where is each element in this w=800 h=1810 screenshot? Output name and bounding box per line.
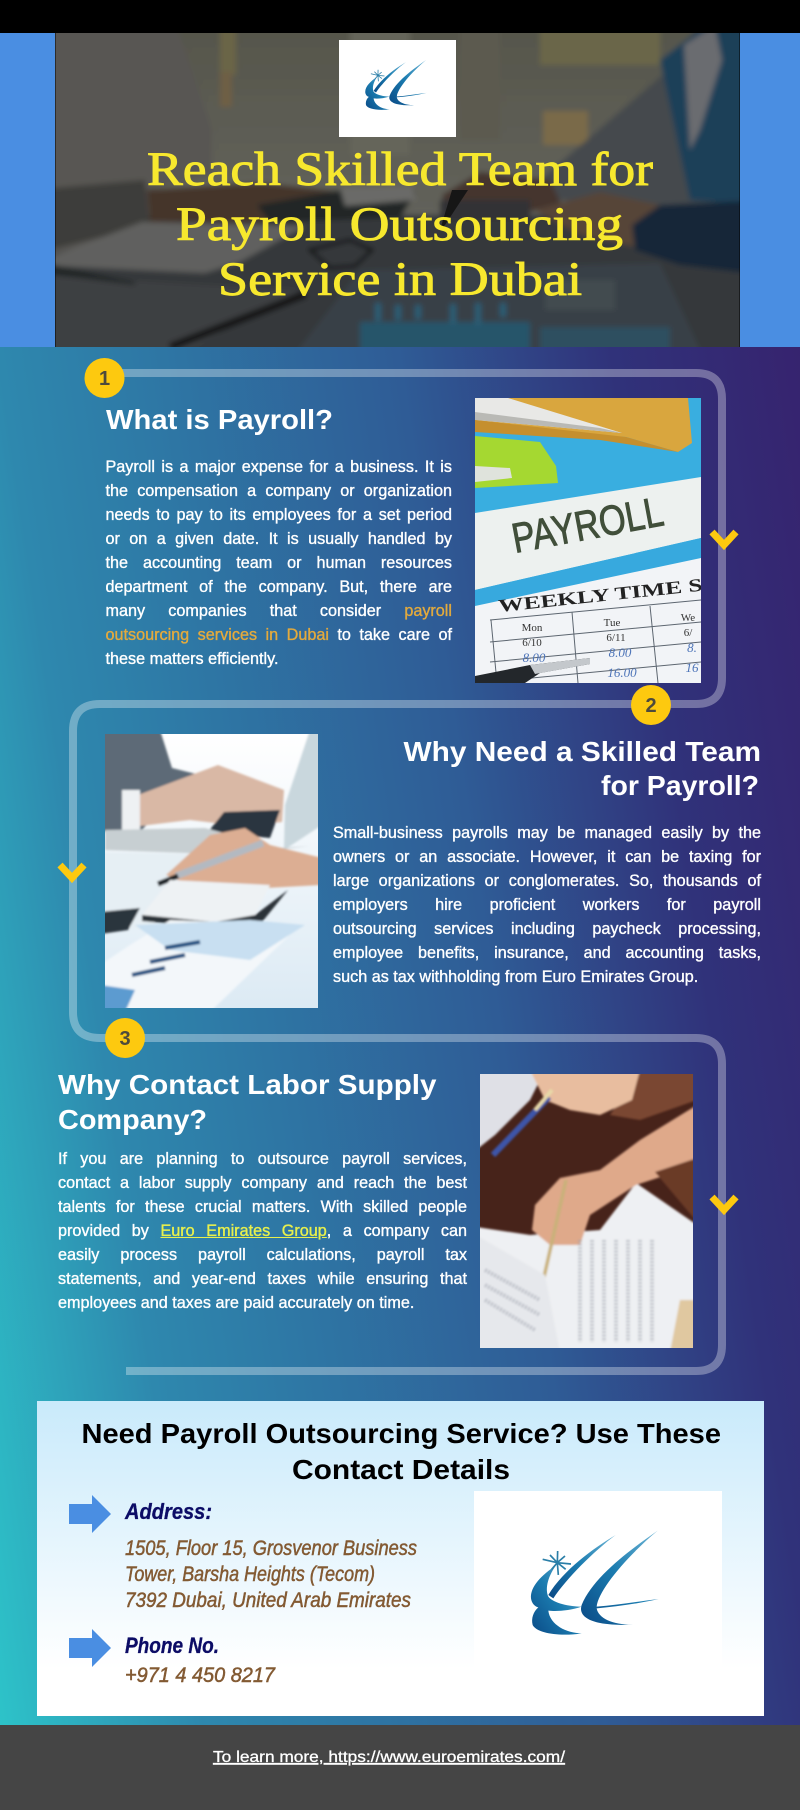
number badge 3 — [105, 1018, 145, 1058]
heading: what is payroll: What is Payroll? — [106, 404, 333, 435]
text block: why contact labor supply — [58, 1150, 468, 1312]
text block: what is payroll: or on a given date. It is usually handled by — [106, 530, 452, 548]
connector path — [73, 373, 722, 1371]
text block: what is payroll: the compensation a company or organization — [106, 482, 452, 500]
contact heading: Contact Details — [292, 1454, 510, 1485]
right person — [544, 76, 716, 208]
top black bar — [0, 0, 800, 33]
address text: 7392 Dubai, United Arab Emirates — [125, 1589, 411, 1612]
blue side strips — [0, 33, 800, 347]
text block: why need a skilled team: employers hire proficient workers for payroll — [333, 896, 761, 914]
contact heading: Need Payroll Outsourcing Service? Use These — [82, 1418, 721, 1449]
contact heading — [82, 1418, 721, 1485]
heading: why contact labor supply: Why Contact Labor Supply — [58, 1069, 437, 1100]
text block: why contact labor supply: provided by Euro Emirates Group, a company can — [58, 1222, 467, 1240]
lower-left table — [56, 278, 290, 347]
number badge 2 — [631, 685, 671, 725]
address label: Address: — [124, 1499, 212, 1524]
photo: payroll folder: 6/10 — [522, 637, 542, 649]
text block: why need a skilled team: owners or an associate. However, it can be taxing for — [333, 848, 761, 866]
photo: signing papers — [476, 1070, 697, 1352]
text block: why contact labor supply: statements, and year-end taxes while ensuring that — [58, 1270, 467, 1288]
phone label: Phone No. — [125, 1633, 219, 1658]
text block: what is payroll: department of the company. But, there are — [106, 578, 452, 596]
address text: 1505, Floor 15, Grosvenor Business — [125, 1537, 417, 1560]
text block: what is payroll: outsourcing services in Dubai to take care of — [106, 626, 452, 644]
photo: payroll folder: Mon — [522, 622, 543, 634]
text block: what is payroll: the accounting team or human resources — [106, 554, 452, 572]
number badge 1 — [84, 358, 124, 398]
photo: payroll folder: WEEKLY TIME S — [497, 575, 703, 616]
title: Service in Dubai — [218, 253, 582, 306]
text block: why need a skilled team: large organizations or conglomerates. So, thousands of — [333, 872, 761, 890]
document bottom right — [302, 264, 698, 347]
chevron 3 — [712, 1197, 736, 1210]
panel: header photo — [56, 33, 740, 347]
photo: payroll folder: 8. — [687, 640, 697, 655]
text block: why need a skilled team: outsourcing services including paycheck processing, — [333, 920, 761, 938]
panel: contact details — [37, 1401, 764, 1716]
text block: why contact labor supply: easily process payroll calculations, payroll tax — [58, 1246, 467, 1264]
address text: Tower, Barsha Heights (Tecom) — [125, 1563, 375, 1586]
text block: why need a skilled team: Small-business payrolls may be managed easily by the — [333, 824, 761, 842]
text block: why contact labor supply: talents for these crucial matters. With skilled people — [58, 1198, 467, 1216]
photo: payroll folder: Tue — [604, 617, 620, 629]
title: Reach Skilled Team for — [147, 143, 653, 196]
text block: what is payroll: needs to pay to its employees for a set period — [106, 506, 452, 524]
text block: what is payroll: Payroll is a major expense for a business. It is — [106, 458, 452, 476]
photo: payroll folder: 16.00 — [607, 665, 637, 680]
photo: payroll folder: 6/ — [684, 627, 693, 639]
text block: what is payroll — [106, 458, 452, 668]
glasses — [310, 240, 372, 268]
text block: why contact labor supply: If you are planning to outsource payroll services, — [58, 1150, 467, 1168]
text block: why need a skilled team: employee benefits, insurance, and accounting tasks, — [333, 944, 761, 962]
photo: hands on laptop — [100, 730, 322, 1012]
title — [147, 143, 653, 306]
chevron 1 — [712, 532, 736, 545]
number badge 1: 1 — [99, 368, 110, 390]
footer link: To learn more, https://www.euroemirates.com/ — [213, 1749, 566, 1766]
text block: why contact labor supply: employees and taxes are paid accurately on time. — [58, 1294, 414, 1312]
logo box bottom — [474, 1491, 722, 1697]
heading: why contact labor supply — [58, 1069, 437, 1135]
text block: why need a skilled team: such as tax withholding from Euro Emirates Group. — [333, 968, 698, 986]
text block: why contact labor supply: contact a labor supply company and reach the best — [58, 1174, 467, 1192]
text block: what is payroll: many companies that consider payroll — [106, 602, 452, 620]
address text — [125, 1537, 417, 1612]
photo: payroll folder: 8.00 — [609, 645, 632, 660]
photo: payroll folder: 16 — [686, 660, 699, 675]
arrow: address — [69, 1495, 111, 1533]
heading: why need a skilled team — [404, 736, 761, 801]
photo: payroll folder — [475, 398, 703, 683]
left person — [56, 144, 209, 256]
heading: why contact labor supply: Company? — [58, 1104, 207, 1135]
calculator — [257, 190, 416, 222]
text block: why need a skilled team — [333, 824, 762, 986]
chevron 2 — [60, 865, 84, 878]
logo box top — [339, 40, 456, 137]
number badge 2: 2 — [645, 695, 657, 717]
photo: payroll folder: 6/11 — [606, 632, 626, 644]
text block: what is payroll: these matters efficiently. — [106, 650, 279, 668]
arrow: phone — [69, 1629, 111, 1667]
photo: payroll folder: PAYROLL — [508, 488, 667, 562]
phone number: +971 4 450 8217 — [125, 1664, 276, 1687]
photo: payroll folder: We — [681, 612, 695, 624]
heading: why need a skilled team: Why Need a Skilled Team — [404, 736, 761, 767]
photo: payroll folder: 8.00 — [523, 650, 546, 665]
number badge 3: 3 — [119, 1028, 131, 1050]
heading: why need a skilled team: for Payroll? — [601, 770, 759, 801]
footer bar — [0, 1725, 800, 1810]
title: Payroll Outsourcing — [176, 198, 623, 251]
gradient background section — [0, 347, 800, 1725]
notebook — [30, 222, 305, 273]
